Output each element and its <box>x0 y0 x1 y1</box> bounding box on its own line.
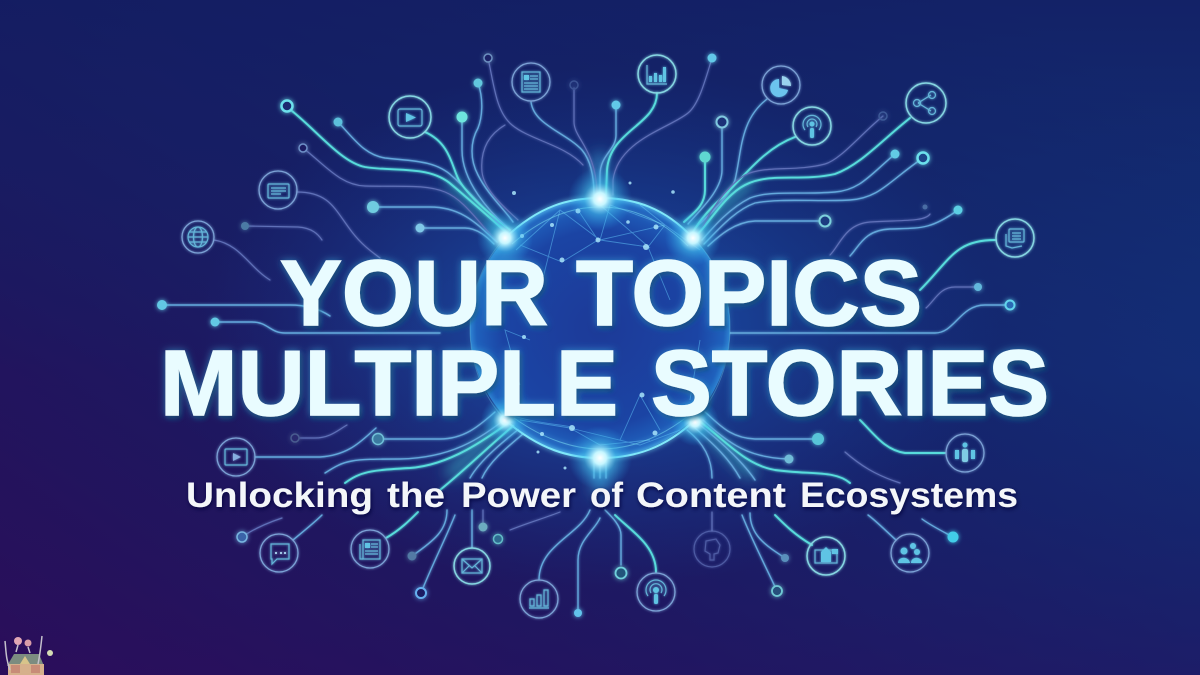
icon: faint tablet bottom <box>694 531 730 567</box>
glowing line bundles around the globe <box>452 160 750 490</box>
subtitle: of <box>590 476 623 515</box>
title line 1: YOUR <box>280 241 548 345</box>
network lines: top left <box>162 58 597 333</box>
globe network mesh <box>505 205 700 445</box>
icon: share <box>906 83 946 123</box>
icon: globe left <box>182 221 214 253</box>
subtitle: the <box>387 476 445 515</box>
title <box>160 241 1049 435</box>
globe bright spots <box>477 167 721 490</box>
network lines: top right <box>600 58 1010 333</box>
icon: podcast top right <box>793 107 831 145</box>
icon: podcast bottom <box>637 573 675 611</box>
globe rim arcs <box>470 198 730 458</box>
icon: speech bubble bottom <box>260 534 298 572</box>
globe <box>470 167 730 490</box>
subtitle: Ecosystems <box>800 476 1018 515</box>
icon: bar chart bottom <box>520 580 558 618</box>
title line 2 <box>160 331 1049 435</box>
icon: group of people bottom right <box>891 534 929 572</box>
title line 2: MULTIPLE <box>160 331 618 435</box>
icon: newspaper bottom <box>351 530 389 568</box>
icon: video top left <box>389 96 431 138</box>
subtitle: Power <box>461 476 576 515</box>
icon: pie chart <box>762 66 800 104</box>
icon: document top <box>512 63 550 101</box>
node dots and rings <box>157 54 1014 617</box>
icon: speech note left <box>259 171 297 209</box>
icon: video bottom left <box>217 438 255 476</box>
subtitle: Unlocking <box>186 476 373 515</box>
subtitle <box>186 476 1018 515</box>
icon: envelope <box>454 548 490 584</box>
icon: bar chart top <box>638 55 676 93</box>
title line 1: TOPICS <box>576 241 922 345</box>
globe nodes <box>512 182 675 470</box>
icon: people group right <box>946 434 984 472</box>
watermark: house logo <box>5 636 53 675</box>
title line 1 <box>280 241 922 345</box>
icon: camera cards bottom <box>807 537 845 575</box>
title line 2: STORIES <box>651 331 1049 435</box>
subtitle: Content <box>636 476 786 515</box>
network lines: bottom right <box>594 412 953 591</box>
icon: chat bubbles right <box>996 219 1034 257</box>
network lines: bottom left <box>242 412 600 613</box>
